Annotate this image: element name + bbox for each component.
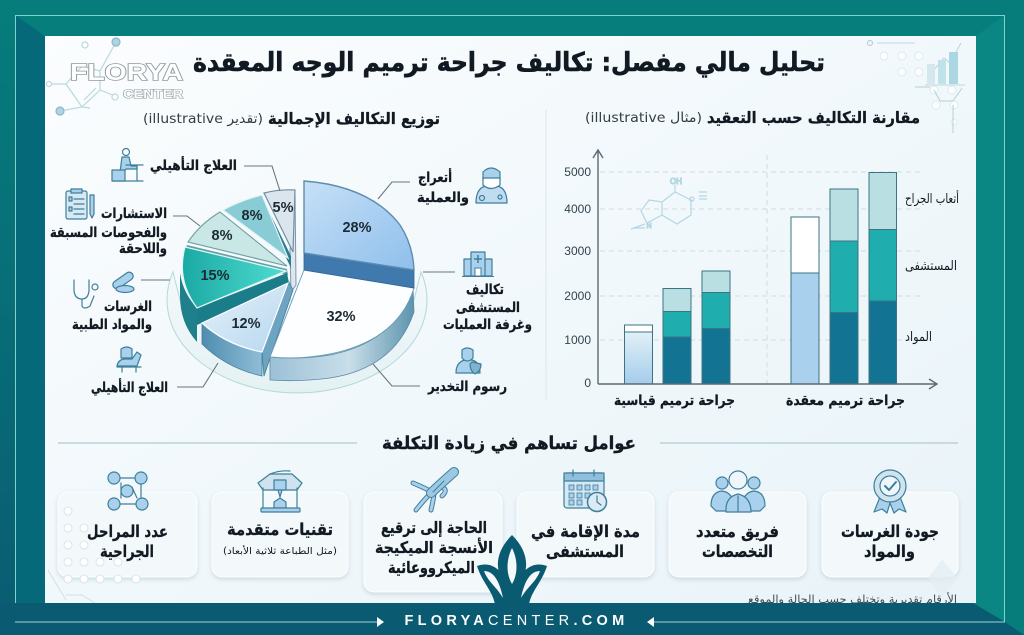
- bar chart: cost comparison: [564, 150, 959, 409]
- label: anesthesia fees: رسوم التخدير: [427, 379, 507, 395]
- website text: FLORYACENTER.COM: [404, 613, 629, 629]
- group labels: جراحة ترميم قياسية: [614, 393, 735, 409]
- slice wall 8% mid: [258, 197, 291, 268]
- slice 8% light: [188, 212, 287, 266]
- complex surgery bars: [791, 172, 896, 384]
- card: multidisciplinary team: [669, 471, 806, 577]
- slice 12%: [202, 283, 288, 352]
- heading: cost distribution: (تقدير illustrative): [143, 111, 263, 127]
- pie chart: 15%: [200, 268, 230, 284]
- card: microvascular tissue grafting: الميكرووعائية: [388, 558, 475, 577]
- label: surgeon and procedure fees: أتعراج: [418, 168, 452, 186]
- card: microvascular tissue grafting: الحاجة إلى ترقيع: [381, 518, 487, 537]
- divider between charts: [545, 110, 547, 400]
- label: implants and medical supplies: [72, 299, 152, 333]
- grid lines: [600, 155, 920, 384]
- section heading: cost factors: عوامل تساهم في زيادة التكلفة: [382, 434, 636, 454]
- logo: FLORYA CENTER watermark: CENTER: [123, 87, 183, 101]
- card: implant quality: جودة الغرسات: [841, 522, 939, 542]
- card: advanced techniques: تقنيات متقدمة: [227, 520, 333, 539]
- slice 15%: [182, 247, 286, 308]
- card: implant quality: [822, 470, 958, 597]
- logo: FLORYA CENTER watermark: [70, 59, 183, 101]
- decorative chemical structure: N: [646, 223, 652, 230]
- decorative sparkle: [928, 560, 958, 597]
- icon: stethoscope and pill: [74, 271, 135, 308]
- label: implants and medical supplies: الغرسات: [104, 299, 152, 315]
- bar chart: cost comparison: جراحة ترميم معقدة: [786, 393, 905, 409]
- wall 15%: [180, 273, 197, 342]
- label: rehabilitation top: العلاج التأهيلي: [150, 156, 237, 174]
- label: consultations and exams: واللاحقة: [119, 241, 167, 257]
- pie chart: 5%: [273, 200, 294, 216]
- card: advanced techniques: (مثل الطباعة ثلاثية الأبعاد): [223, 545, 337, 557]
- decorative dots: [64, 507, 140, 583]
- slice wall 5%: [290, 190, 296, 292]
- label: rehabilitation bottom: العلاج التأهيلي: [91, 378, 168, 396]
- label: surgeon and procedure fees: [417, 168, 469, 206]
- axes: [593, 150, 937, 389]
- series labels: المستشفى: [905, 259, 957, 274]
- footnote: الأرقام تقديرية وتختلف حسب الحالة والموقع: [748, 592, 957, 607]
- icon: hospital: [462, 252, 494, 276]
- icon: team: [711, 471, 765, 512]
- base ring: [167, 272, 427, 393]
- axis numbers: 0: [584, 376, 591, 390]
- card: microvascular tissue grafting: [364, 472, 502, 592]
- card: microvascular tissue grafting: الأنسجة الميكيجة: [375, 538, 493, 557]
- icon: anesthesiologist: [456, 348, 481, 374]
- icon: clipboard: [66, 189, 94, 219]
- pie chart: 32%: [326, 309, 356, 325]
- label: hospital and operating room: المستشفى: [456, 300, 520, 316]
- card: implant quality: والمواد: [864, 542, 915, 562]
- axis numbers: 1000: [564, 333, 591, 347]
- icon: calendar and clock: [564, 470, 606, 512]
- heading: comparison by complexity: مقارنة التكاليف حسب التعقيد: [707, 108, 920, 127]
- icon: rehabilitation doctor: [117, 347, 141, 372]
- axis numbers: 2000: [564, 289, 591, 303]
- wall 12%: [202, 323, 262, 376]
- heading: cost distribution: [143, 109, 440, 128]
- heading: comparison by complexity: [585, 108, 920, 127]
- axis numbers: 3000: [564, 244, 591, 258]
- card: surgical stages: [58, 472, 197, 583]
- slice wall 8% light: [185, 245, 288, 275]
- heading: cost distribution: توزيع التكاليف الإجمالية: [268, 109, 440, 128]
- label: hospital and operating room: تكاليف: [466, 282, 504, 298]
- wall 32%: [270, 288, 414, 381]
- slice 28%: [304, 181, 414, 270]
- slice 32%: [270, 270, 414, 358]
- label: consultations and exams: والفحوصات المسبقة: [50, 225, 167, 241]
- wall 28%: [304, 253, 414, 288]
- slice 5%: [264, 190, 295, 252]
- decorative molecule bottom-left: [48, 570, 95, 603]
- logo: FLORYA CENTER watermark: FLORYA: [70, 59, 183, 85]
- icon: lotus logo: [477, 535, 547, 604]
- decoration: top-right chart motif: [868, 40, 965, 133]
- card: surgical stages: الجراحية: [100, 542, 154, 562]
- series labels: المواد: [905, 330, 932, 345]
- pie chart: 8%: [242, 208, 263, 224]
- label: consultations and exams: الاستشارات: [101, 206, 167, 222]
- decorative chemical structure: OH: [670, 177, 682, 186]
- icon: surgeon: [476, 168, 507, 203]
- icon: vessels: [413, 472, 454, 510]
- decorative molecule behind logo: [46, 38, 120, 115]
- decorative chemical structure: [631, 177, 707, 230]
- label: hospital and operating room: وغرفة العمليات: [443, 317, 532, 333]
- label: consultations and exams: [50, 206, 167, 257]
- percent labels: 28%: [342, 220, 372, 236]
- standard surgery bars: [624, 271, 730, 384]
- series labels: أتعاب الجراح: [905, 190, 959, 207]
- pie chart: 12%: [231, 316, 261, 332]
- card: hospital stay: [517, 470, 654, 577]
- label: implants and medical supplies: والمواد الطبية: [72, 317, 152, 333]
- label: hospital and operating room: [443, 282, 532, 333]
- slice 8% mid: [223, 195, 288, 258]
- axis numbers: 4000: [564, 202, 591, 216]
- card: multidisciplinary team: فريق متعدد: [696, 522, 779, 542]
- pie leader lines: [141, 166, 455, 387]
- icon: quality badge: [874, 470, 906, 513]
- series labels: [905, 190, 959, 345]
- pie chart: [167, 181, 427, 393]
- icon: process flow: [108, 472, 148, 510]
- axis numbers: 5000: [564, 165, 591, 179]
- icon: patient at desk: [112, 148, 143, 181]
- axis numbers: [564, 165, 591, 390]
- label: surgeon and procedure fees: والعملية: [417, 190, 469, 206]
- footer band: [0, 603, 1024, 635]
- card: hospital stay: المستشفى: [546, 542, 624, 561]
- icon: 3D printer: [258, 471, 302, 512]
- card: hospital stay: مدة الإقامة في: [531, 522, 640, 542]
- pie chart: 8%: [212, 228, 233, 244]
- card: surgical stages: عدد المراحل: [87, 522, 168, 542]
- title: تحليل مالي مفصل: تكاليف جراحة ترميم الوجه المعقدة: [193, 48, 825, 78]
- card: multidisciplinary team: التخصصات: [702, 542, 773, 561]
- card: advanced techniques: [212, 471, 348, 577]
- heading: comparison by complexity: (مثال illustrative): [585, 110, 702, 126]
